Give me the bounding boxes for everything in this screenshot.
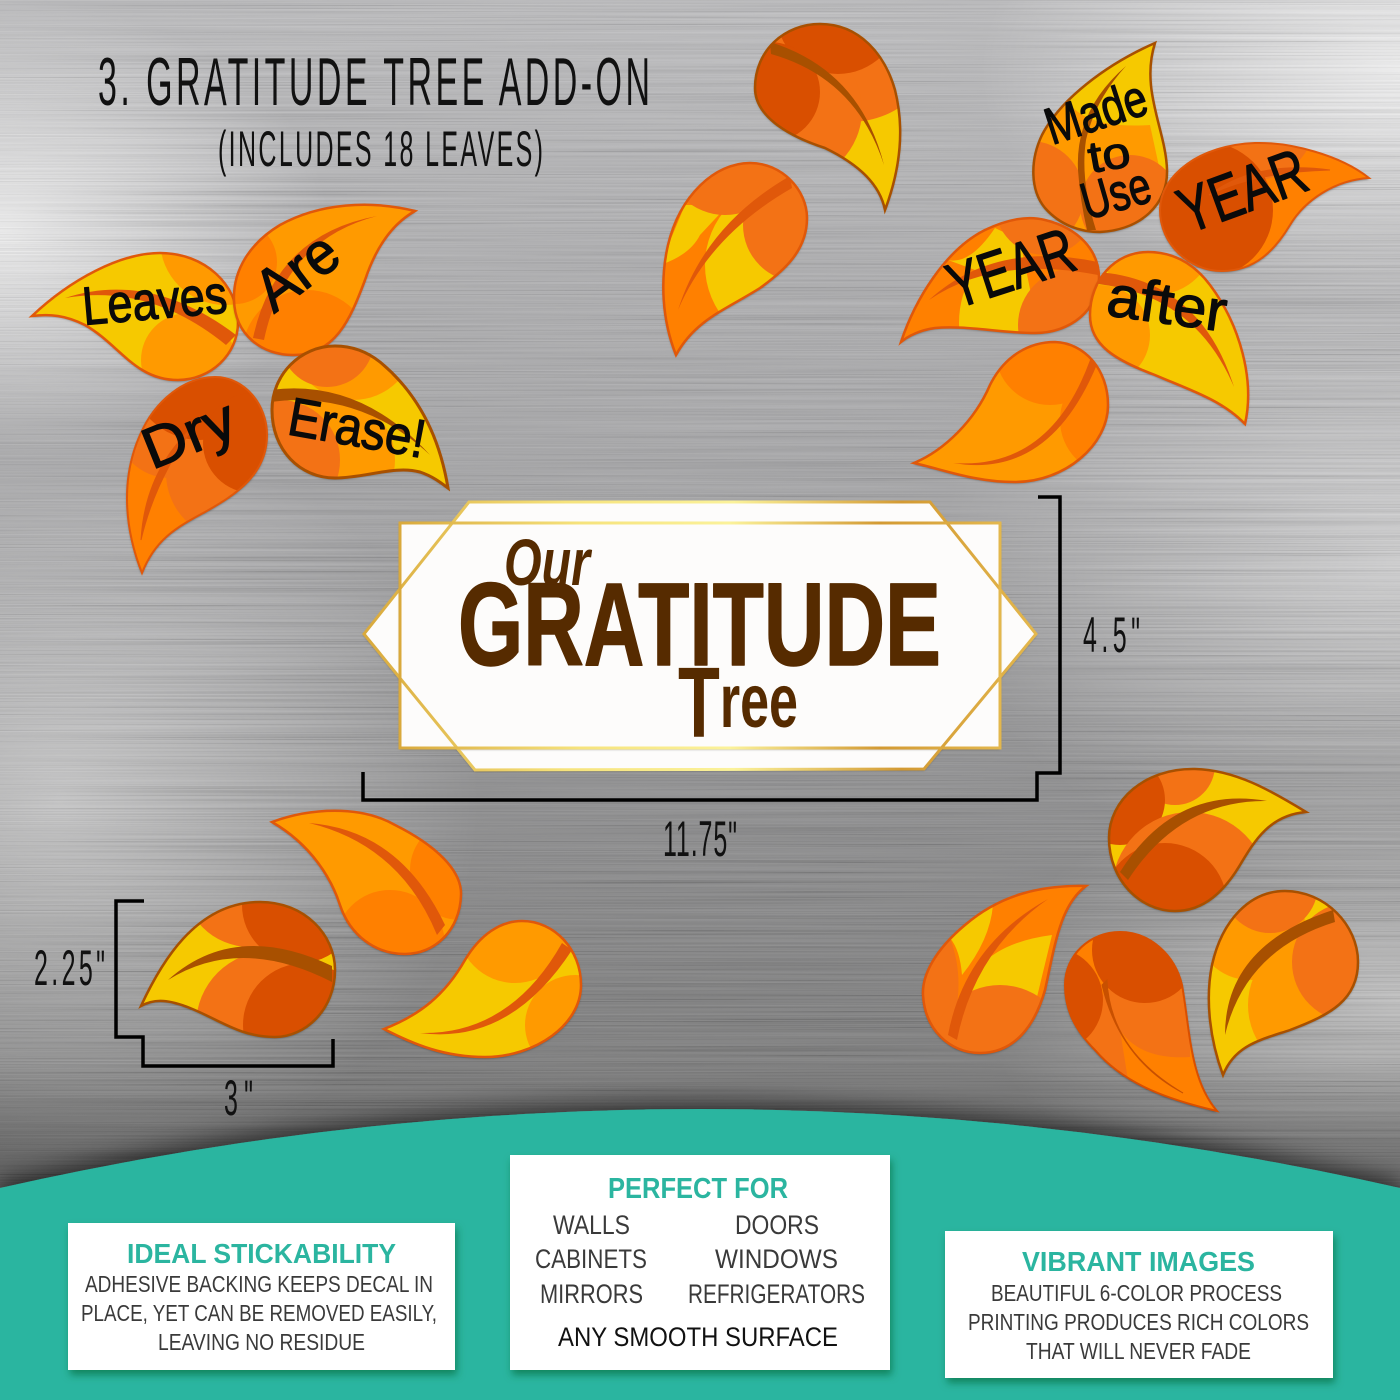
panel: ideal stickability: LEAVING NO RESIDUE [158,1329,365,1355]
leaf: Are [232,204,418,358]
leaf: YEAR right: YEAR [1168,134,1317,247]
leaf: Made to Use: Made [1038,69,1155,156]
leaf: Leaves [28,252,240,382]
panel: perfect for: WALLS [553,1210,630,1240]
leaf: bottom-right middle [1064,931,1220,1113]
panel: perfect for [510,1155,890,1370]
panel: ideal stickability: ADHESIVE BACKING KEEPS DECAL IN [85,1271,433,1297]
leaf: bottom-left measured [138,900,336,1040]
leaf: Dry: Dry [133,386,245,482]
leaf: Erase! [270,344,450,492]
panel: perfect for: DOORS [735,1210,819,1240]
leaf: bottom-left right [381,920,582,1060]
dimension: plaque size: 4.5" [1083,608,1140,663]
leaf: bottom of top-right group [910,340,1110,484]
leaf: Erase!: Erase! [284,387,430,470]
leaf: bottom-right left [922,884,1090,1056]
leaf: bottom-left upper [269,810,462,956]
panel: vibrant images: VIBRANT IMAGES [1022,1246,1255,1277]
panel: vibrant images [945,1231,1333,1378]
panel: perfect for: MIRRORS [540,1279,643,1309]
plaque: Our Gratitude Tree: T [678,647,739,759]
leaf: top centre left [662,162,808,358]
leaf: top centre brown [754,22,902,214]
title: (INCLUDES 18 LEAVES) [218,122,543,177]
panel: ideal stickability: PLACE, YET CAN BE REMOVED EASILY, [81,1300,437,1326]
leaf: Made to Use [1032,40,1169,234]
panel: ideal stickability [68,1223,455,1370]
panel: perfect for: PERFECT FOR [608,1173,788,1205]
panel: perfect for: ANY SMOOTH SURFACE [558,1322,838,1352]
teal footer arc [0,1109,1400,1400]
dimension: leaf size: 2.25" [34,941,105,996]
plaque: Our Gratitude Tree: GRATITUDE [458,559,941,691]
leaf: Made to Use: to [1084,127,1134,183]
leaf: Dry [126,376,268,576]
panel: perfect for: CABINETS [535,1244,647,1274]
leaf: YEAR left [898,216,1100,346]
leaf: bottom-right top [1108,768,1310,914]
leaf: after [1088,250,1250,426]
plaque: Our Gratitude Tree [364,502,1036,770]
panel: perfect for: REFRIGERATORS [688,1279,865,1309]
dimension: plaque size [363,497,1140,867]
panel: vibrant images: BEAUTIFUL 6-COLOR PROCESS [991,1280,1282,1306]
panel: vibrant images: PRINTING PRODUCES RICH COLORS [968,1309,1309,1335]
dimension: plaque size: 11.75" [663,812,737,867]
leaf: Made to Use: Use [1074,156,1158,232]
title [98,44,650,177]
panel: vibrant images: THAT WILL NEVER FADE [1026,1338,1251,1364]
leaf: after: after [1103,264,1231,345]
leaf: YEAR left: YEAR [938,214,1084,322]
leaf: Leaves: Leaves [80,265,229,337]
panel: ideal stickability: IDEAL STICKABILITY [127,1238,396,1269]
title: 3. GRATITUDE TREE ADD-ON [98,44,650,120]
dimension: leaf size: 3" [224,1071,253,1126]
dimension: leaf size [34,901,333,1126]
plaque: Our Gratitude Tree: ree [720,659,798,744]
plaque: Our Gratitude Tree: Our [504,525,592,599]
panel: perfect for: WINDOWS [715,1244,838,1274]
leaf: bottom-right right [1207,890,1360,1078]
leaf: Are: Are [242,218,352,324]
leaf: YEAR right [1158,142,1372,274]
